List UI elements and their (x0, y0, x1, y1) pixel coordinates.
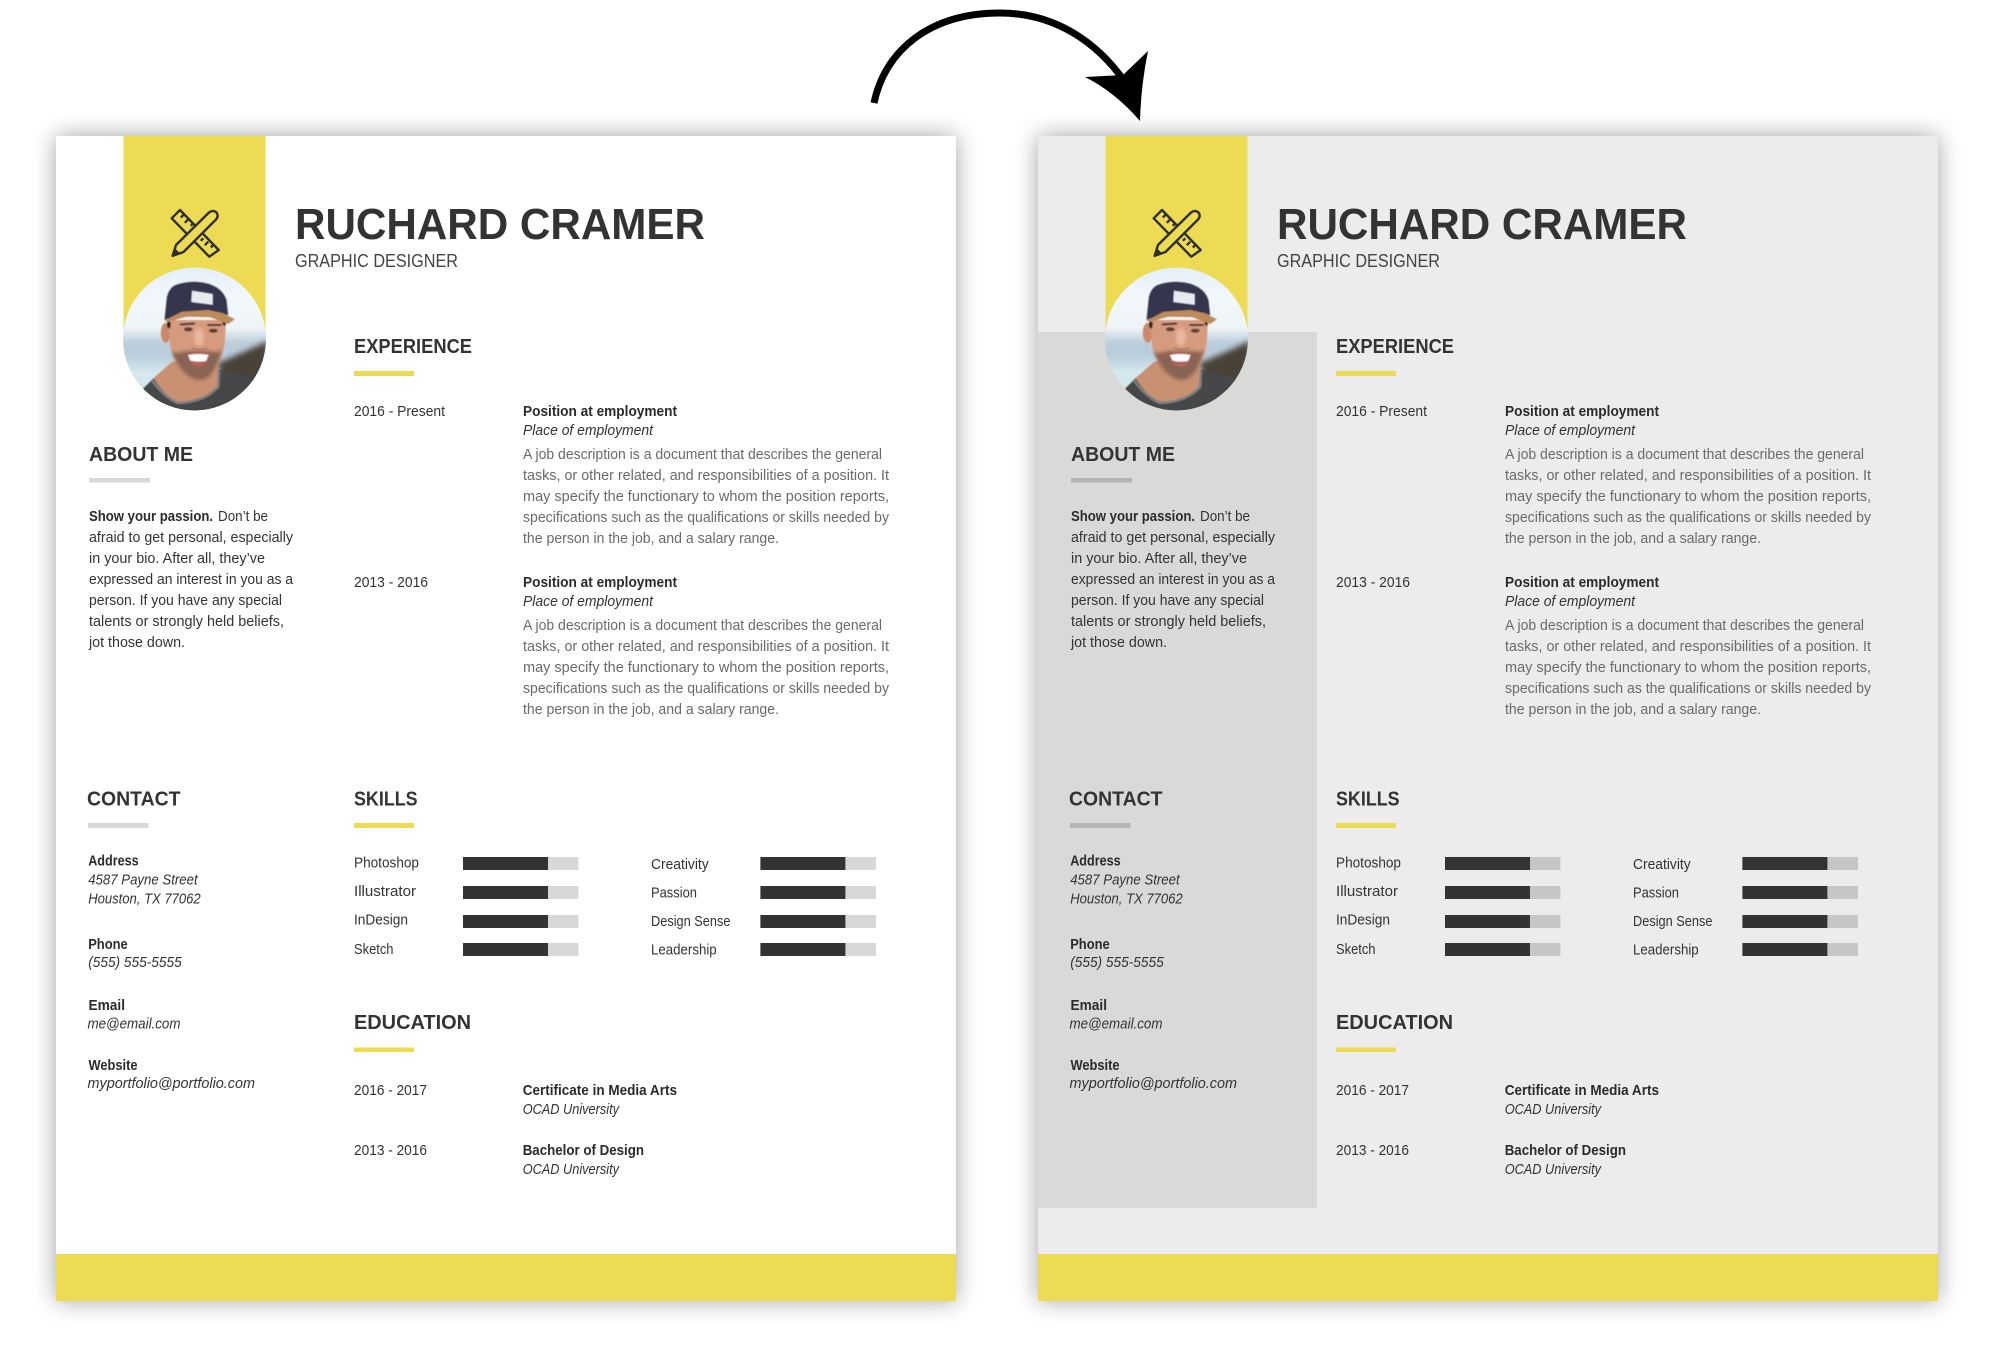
section: about me: person. If you have any special (1071, 592, 1264, 609)
section: education: 2016 - 2017 (1336, 1082, 1409, 1099)
section: education: OCAD University (523, 1161, 620, 1178)
section: experience: 2016 - Present (1336, 403, 1428, 420)
section: about me: in your bio. After all, they’ve (1071, 550, 1247, 567)
photo: smiling man in cap (120, 265, 270, 415)
section: contact: Phone (1070, 936, 1110, 953)
section: about me: in your bio. After all, they’ve (89, 550, 265, 567)
section: education: EDUCATION (354, 1012, 471, 1034)
section: contact: myportfolio@portfolio.com (88, 1075, 255, 1092)
panel: white resume (56, 136, 956, 1301)
title: name: RUCHARD CRAMER (295, 200, 705, 249)
section: skills bar chart: Design Sense (1633, 913, 1712, 930)
section: education: 2013 - 2016 (354, 1142, 427, 1159)
section: experience: may specify the functionary to whom the position reports, (1505, 659, 1871, 676)
section: skills bar chart: InDesign (1336, 912, 1390, 928)
section: skills bar chart (354, 788, 876, 958)
section: about me: ABOUT ME (89, 444, 193, 466)
section: about me: Show your passion. (89, 508, 213, 525)
section: education: OCAD University (1505, 1101, 1602, 1118)
section: about me: talents or strongly held beliefs, (1071, 613, 1266, 630)
section: experience: tasks, or other related, and responsibilities of a position. It (1505, 467, 1872, 484)
section: about me: afraid to get personal, especially (89, 529, 293, 546)
section: about me: afraid to get personal, especially (1071, 529, 1275, 546)
section: about me: expressed an interest in you as a (89, 571, 294, 588)
section: skills bar chart: Passion (651, 884, 697, 902)
section: experience: A job description is a document that describes the general (523, 446, 882, 463)
section: skills bar chart: InDesign (354, 912, 408, 928)
section: education: EDUCATION (1336, 1012, 1453, 1034)
icon: crossed ruler and pencil (1154, 210, 1201, 257)
section: contact: Website (1070, 1057, 1120, 1074)
section: about me: talents or strongly held beliefs, (89, 613, 284, 630)
section: experience: Place of employment (523, 593, 654, 610)
section: experience: tasks, or other related, and responsibilities of a position. It (523, 467, 890, 484)
section: about me: ABOUT ME (1071, 444, 1175, 466)
section: experience: the person in the job, and a salary range. (1505, 530, 1761, 547)
section: contact: Address (88, 852, 139, 870)
section: contact: myportfolio@portfolio.com (1070, 1075, 1237, 1092)
section: skills bar chart: SKILLS (1336, 788, 1400, 810)
section: contact: (555) 555-5555 (88, 954, 182, 971)
section: education (1336, 1012, 1659, 1178)
section: experience: specifications such as the qualifications or skills needed by (1505, 680, 1871, 697)
section: experience: specifications such as the qualifications or skills needed by (1505, 509, 1871, 526)
section: experience: A job description is a document that describes the general (1505, 617, 1864, 634)
section: experience (1336, 336, 1872, 718)
section: experience: the person in the job, and a salary range. (523, 701, 779, 718)
section: skills bar chart: Photoshop (354, 854, 419, 872)
section: about me: jot those down. (88, 634, 185, 651)
section: about me (1070, 444, 1276, 651)
section: experience: Position at employment (523, 574, 677, 591)
section: skills bar chart: Illustrator (1336, 883, 1398, 900)
section: skills bar chart: Leadership (1633, 942, 1699, 958)
section: experience: specifications such as the qualifications or skills needed by (523, 509, 889, 526)
section: experience: A job description is a document that describes the general (1505, 446, 1864, 463)
section: experience: tasks, or other related, and responsibilities of a position. It (523, 638, 890, 655)
section: contact: me@email.com (1070, 1016, 1162, 1032)
section: contact: Houston, TX 77062 (88, 890, 201, 908)
section: experience (354, 336, 890, 718)
section: skills bar chart: Design Sense (651, 913, 730, 930)
section: about me: expressed an interest in you as a (1071, 571, 1276, 588)
arrow: curved from left resume to right resume (874, 13, 1148, 121)
section: experience: the person in the job, and a salary range. (523, 530, 779, 547)
section: education: OCAD University (1505, 1161, 1602, 1178)
section: experience: Position at employment (1505, 574, 1659, 591)
section: about me: Don’t be (1200, 508, 1250, 525)
section: education: Certificate in Media Arts (523, 1082, 677, 1099)
section: about me: Show your passion. (1071, 508, 1195, 525)
section: contact (1069, 788, 1237, 1092)
section: contact: Email (1070, 997, 1107, 1014)
section: education (354, 1012, 677, 1178)
section: education: OCAD University (523, 1101, 620, 1118)
section: skills bar chart: Sketch (354, 941, 394, 958)
section: experience: EXPERIENCE (1336, 336, 1454, 358)
section: contact: (555) 555-5555 (1070, 954, 1164, 971)
section: experience: A job description is a document that describes the general (523, 617, 882, 634)
section: skills bar chart: Leadership (651, 942, 717, 958)
section: skills bar chart: Illustrator (354, 883, 416, 900)
section: experience: tasks, or other related, and responsibilities of a position. It (1505, 638, 1872, 655)
subtitle: job title: GRAPHIC DESIGNER (1277, 251, 1440, 271)
section: experience: 2016 - Present (354, 403, 446, 420)
section: education: Bachelor of Design (1505, 1142, 1626, 1159)
section: contact: Email (88, 997, 125, 1014)
photo: smiling man in cap (1102, 265, 1252, 415)
section: experience: Place of employment (1505, 593, 1636, 610)
section: skills bar chart: Passion (1633, 884, 1679, 902)
section: contact: Address (1070, 852, 1121, 870)
section: education: 2016 - 2017 (354, 1082, 427, 1099)
section: education: 2013 - 2016 (1336, 1142, 1409, 1159)
section: experience: Place of employment (1505, 422, 1636, 439)
section: contact: CONTACT (87, 788, 180, 810)
subtitle: job title: GRAPHIC DESIGNER (295, 251, 458, 271)
section: education: Bachelor of Design (523, 1142, 644, 1159)
icon: crossed ruler and pencil (172, 210, 219, 257)
section: about me: Don’t be (218, 508, 268, 525)
section: experience: EXPERIENCE (354, 336, 472, 358)
section: about me: jot those down. (1070, 634, 1167, 651)
section: experience: Place of employment (523, 422, 654, 439)
section: skills bar chart: SKILLS (354, 788, 418, 810)
section: skills bar chart: Creativity (651, 856, 709, 873)
section: experience: 2013 - 2016 (354, 574, 428, 591)
section: contact: me@email.com (88, 1016, 180, 1032)
section: skills bar chart (1336, 788, 1858, 958)
section: about me: person. If you have any special (89, 592, 282, 609)
section: contact: 4587 Payne Street (1070, 872, 1180, 888)
section: skills bar chart: Photoshop (1336, 854, 1401, 872)
section: experience: the person in the job, and a salary range. (1505, 701, 1761, 718)
panel: grey resume (1038, 136, 1938, 1301)
section: education: Certificate in Media Arts (1505, 1082, 1659, 1099)
section: contact: Phone (88, 936, 128, 953)
section: experience: 2013 - 2016 (1336, 574, 1410, 591)
section: experience: may specify the functionary to whom the position reports, (523, 659, 889, 676)
section: experience: Position at employment (1505, 403, 1659, 420)
section: about me (88, 444, 294, 651)
section: contact: 4587 Payne Street (88, 872, 198, 888)
section: contact: Website (88, 1057, 138, 1074)
section: skills bar chart: Creativity (1633, 856, 1691, 873)
title: name: RUCHARD CRAMER (1277, 200, 1687, 249)
section: experience: may specify the functionary to whom the position reports, (523, 488, 889, 505)
section: contact: Houston, TX 77062 (1070, 890, 1183, 908)
section: skills bar chart: Sketch (1336, 941, 1376, 958)
section: contact: CONTACT (1069, 788, 1162, 810)
section: experience: may specify the functionary to whom the position reports, (1505, 488, 1871, 505)
section: contact (87, 788, 255, 1092)
section: experience: Position at employment (523, 403, 677, 420)
section: experience: specifications such as the qualifications or skills needed by (523, 680, 889, 697)
